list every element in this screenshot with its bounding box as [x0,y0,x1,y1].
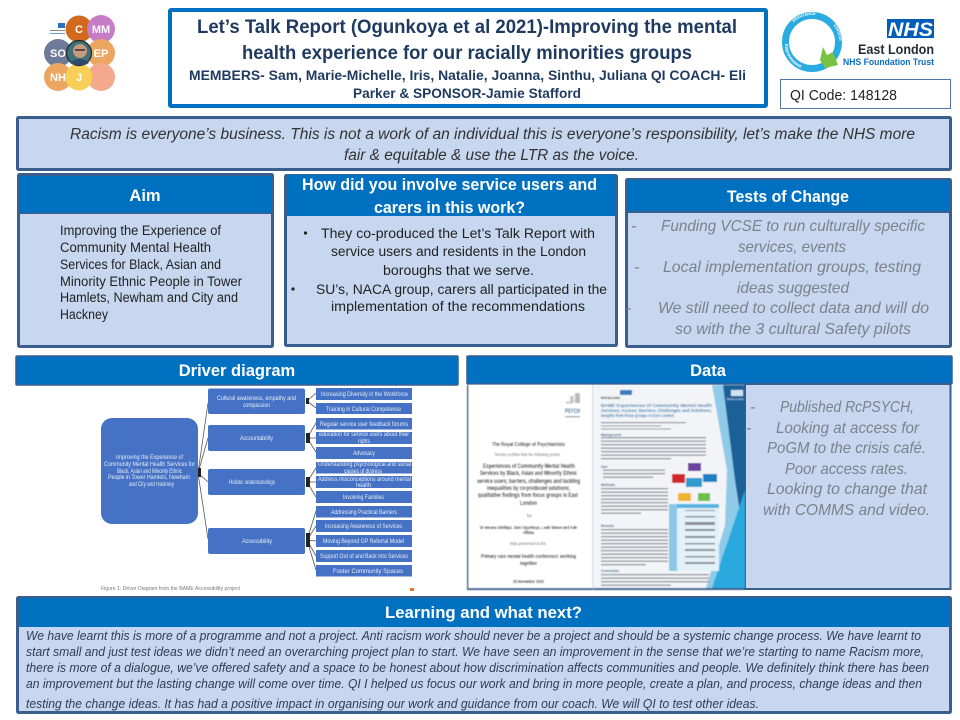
secondary drivers [316,388,412,576]
team members: Parker & SPONSOR-Jamie Stafford [353,86,581,101]
NHS East London logo [843,19,935,68]
heading: data: Data [690,362,727,380]
tests of change list [626,218,929,338]
goal box: Black, Asian and Minority Ethnic [117,468,182,475]
certificate image: London [520,501,537,507]
certificate image: service users; barriers, challenges and tackling [477,479,580,485]
secondary drivers: Training in Cultural Competence [326,406,401,413]
panel: service user involvement [286,175,616,346]
certificate image: Primary care mental health conference: working [481,554,576,560]
secondary drivers: health [356,482,371,489]
certificate image: hereby certifies that the following poster [495,452,560,457]
team member circles: NH [50,72,66,84]
team members [189,68,746,101]
certificate image: 25 November 2022 [513,579,544,585]
NHS East London logo: NHS Foundation Trust [843,57,935,68]
title: Let’s Talk Report (Ogunkoya et al 2021)-Improving the mental [197,17,737,38]
team member circles: SO [50,48,66,60]
poster table [669,504,719,571]
certificate image: together [520,561,538,567]
certificate image: by [527,513,533,518]
team member circles [44,15,115,91]
RCPSYCH crest [565,393,580,418]
secondary drivers: Regular service user feedback forums [320,421,408,428]
RCPSYCH crest: PSYCH [565,409,580,415]
goal box: Community Mental Health Services for [104,461,195,468]
icon: QI ring logo: control [834,24,842,40]
secondary drivers: education for service users about their [319,431,409,438]
data commentary panel: - [750,399,755,416]
certificate image: Services by Black, Asian and Minority Ethnic [480,471,577,477]
learning text: testing the change ideas. It has had a positive impact in organising our work and guidance from our coach. We will QI to test other ideas. [26,697,759,711]
learning text: We have learnt this is more of a programme and not a project. Anti racism work should never be a project and should be a systemic change process. We have learnt to [26,629,921,643]
statement banner: fair & equitable & use the LTR as the voice. [344,147,639,164]
panel: driver diagram heading [16,356,458,385]
secondary drivers: Increasing Awareness of Services [325,523,402,530]
data commentary panel [745,384,950,589]
team members: MEMBERS- Sam, Marie-Michelle, Iris, Natalie, Joanna, Sinthu, Juliana QI COACH- Eli [189,68,746,83]
learning text: there is more of a dialogue, we’ve offered safety and a space to be honest about how discrimination affects communities and people. We definitely think there has been [26,661,929,675]
certificate image: Dr Imrana Siddiqui, Sam Ogunkoya, Leah Simon and Ade [480,525,577,531]
heading: involvement [302,176,597,217]
poster diagram [672,463,717,501]
primary drivers [208,388,305,554]
research poster image: East London [727,397,744,401]
certificate image: Experiences of Community Mental Health [483,464,575,470]
secondary drivers: Increasing Diversity in the Workforce [321,391,408,398]
QI code box: QI Code: 148128 [790,88,897,104]
data commentary panel: Published RcPSYCH, [780,399,914,416]
title [197,17,737,64]
research poster image: North East London [601,396,620,400]
learning text: an improvement but the lasting change will come over time. QI I helped us focus our work and bring in more people, create a plan, and process, change ideas and then [26,677,922,691]
data commentary panel: - [746,420,751,437]
team member circles: MM [92,24,110,36]
aim text: Services for Black, Asian and [60,257,221,272]
tests of change list: ideas suggested [737,280,850,297]
secondary drivers: Address misconceptions around mental [318,476,411,483]
NHS East London logo: East London [858,41,934,57]
secondary drivers: Understanding psychological and social [318,461,411,468]
QI code box [780,80,950,108]
aim text: Hackney [60,307,108,322]
heading: aim: Aim [129,187,161,205]
secondary drivers: Moving Beyond GP Referral Model [323,538,404,545]
primary drivers: Accessibility [242,538,273,545]
involvement bullets: boroughs that we serve. [383,263,534,278]
aim text [60,223,242,322]
heading: tests of change: Tests of Change [727,188,849,206]
icon: QI ring logo [782,12,842,72]
involvement bullets [291,226,607,314]
aim text: Hamlets, Newham and City and [60,290,238,305]
team member circles: EP [94,48,108,60]
primary drivers: Accountability [240,435,274,442]
secondary drivers: causes of distress [344,468,382,475]
tests of change list: Funding VCSE to run culturally specific [661,218,925,235]
title box [170,10,766,106]
figure caption: Figure 1: Driver Diagram from the BAME Accessibility project [101,586,240,592]
research poster image: Background [601,433,622,437]
secondary drivers: rights [358,438,370,445]
data commentary panel: Looking to change that [767,481,928,498]
certificate image: Afilaka [523,530,534,536]
statement banner: Racism is everyone’s business. This is not a work of an individual this is everyone’s responsibility, let’s make the NHS more [70,126,915,143]
panel: data [467,356,952,590]
secondary drivers: Involving Families [343,494,384,501]
panel: learning and what next [18,598,950,712]
goal box: and City and Hackney [129,481,175,488]
tests of change list: so with the 3 cultural Safety pilots [675,321,911,338]
tests of change list: - [634,259,639,276]
tests of change list: services, events [738,239,846,256]
aim text: Community Mental Health [60,240,211,255]
certificate image: The Royal College of Psychiatrists [492,442,565,448]
title: health experience for our racially minorities groups [242,43,692,64]
research poster image: BAME Experiences of Community Mental Health [601,403,712,409]
tests of change list: - [626,300,631,317]
data commentary panel: PoGM to the crisis café. [767,440,926,457]
research poster image: Aim: [601,465,608,469]
goal box [101,418,198,524]
heading: learning: Learning and what next? [385,604,582,622]
primary drivers: Cultural awareness, empathy and [217,395,296,402]
tests of change list: - [631,218,636,235]
secondary drivers: Foster Community Spaces [333,568,403,575]
aim text: Minority Ethnic People in Tower [60,274,242,289]
icon: QI ring logo: assurance [792,12,816,22]
learning text [26,629,929,711]
research poster image: Services; Access, Barriers, Challenges and Solutions; [601,408,712,414]
research poster image: Conclusion [601,569,620,573]
secondary drivers: Addressing Practical Barriers [331,509,397,516]
primary drivers: Holistic understandings [229,479,275,486]
heading: involvement: carers in this work? [374,199,525,217]
connectors [198,393,316,570]
data commentary panel: Looking at access for [776,420,920,437]
NHS badge: NHS [888,20,933,41]
goal box: People in Tower Hamlets, Newham [108,474,190,481]
research poster image: Insights from focus groups in East London [601,413,674,419]
certificate image: qualitative findings from focus groups in East [478,493,578,499]
data commentary panel: with COMMS and video. [763,502,930,519]
aim text: Improving the Experience of [60,223,221,238]
heading: involvement: How did you involve service users and [302,176,597,194]
involvement bullets: They co-produced the Let’s Talk Report with [321,226,595,241]
tests of change list: Local implementation groups, testing [663,259,921,276]
certificate image: inequalities by co-produced solutions; [487,486,570,492]
certificate image: Was presented at the [510,541,546,546]
research poster image: Results [601,524,614,528]
photo avatar [66,40,92,66]
secondary drivers: Advocacy [353,450,376,457]
primary drivers: compassion [243,402,270,409]
certificate image [467,385,593,590]
RCPSYCH crest: RC [566,400,572,405]
team member circles: J [76,72,82,84]
team member circles: C [75,24,83,36]
involvement bullets: service users and residents in the London [331,244,586,259]
research poster image [593,385,745,590]
involvement bullets: implementation of the recommendations [331,299,585,314]
learning text: start small and just test ideas we didn’t need an overarching project plan to start. We have seen an improvement in the sense that we’re starting to name Racism more, [26,645,924,659]
panel: aim [18,174,272,346]
involvement bullets: SU’s, NACA group, carers all participated in the [316,282,607,297]
statement banner [18,118,950,170]
small NHS logo [46,20,70,38]
panel: driver diagram heading: Driver diagram [179,362,295,380]
panel: tests of change [626,180,950,346]
goal box: Improving the Experience of [116,454,183,461]
tests of change list: We still need to collect data and will do [658,300,929,317]
icon: QI ring logo: Improvement [784,44,802,68]
research poster image: Methods [601,483,615,487]
driver diagram chart [101,388,414,592]
secondary drivers: Support Out of and Back Into Services [320,553,408,560]
data commentary panel: Poor access rates. [785,461,908,478]
